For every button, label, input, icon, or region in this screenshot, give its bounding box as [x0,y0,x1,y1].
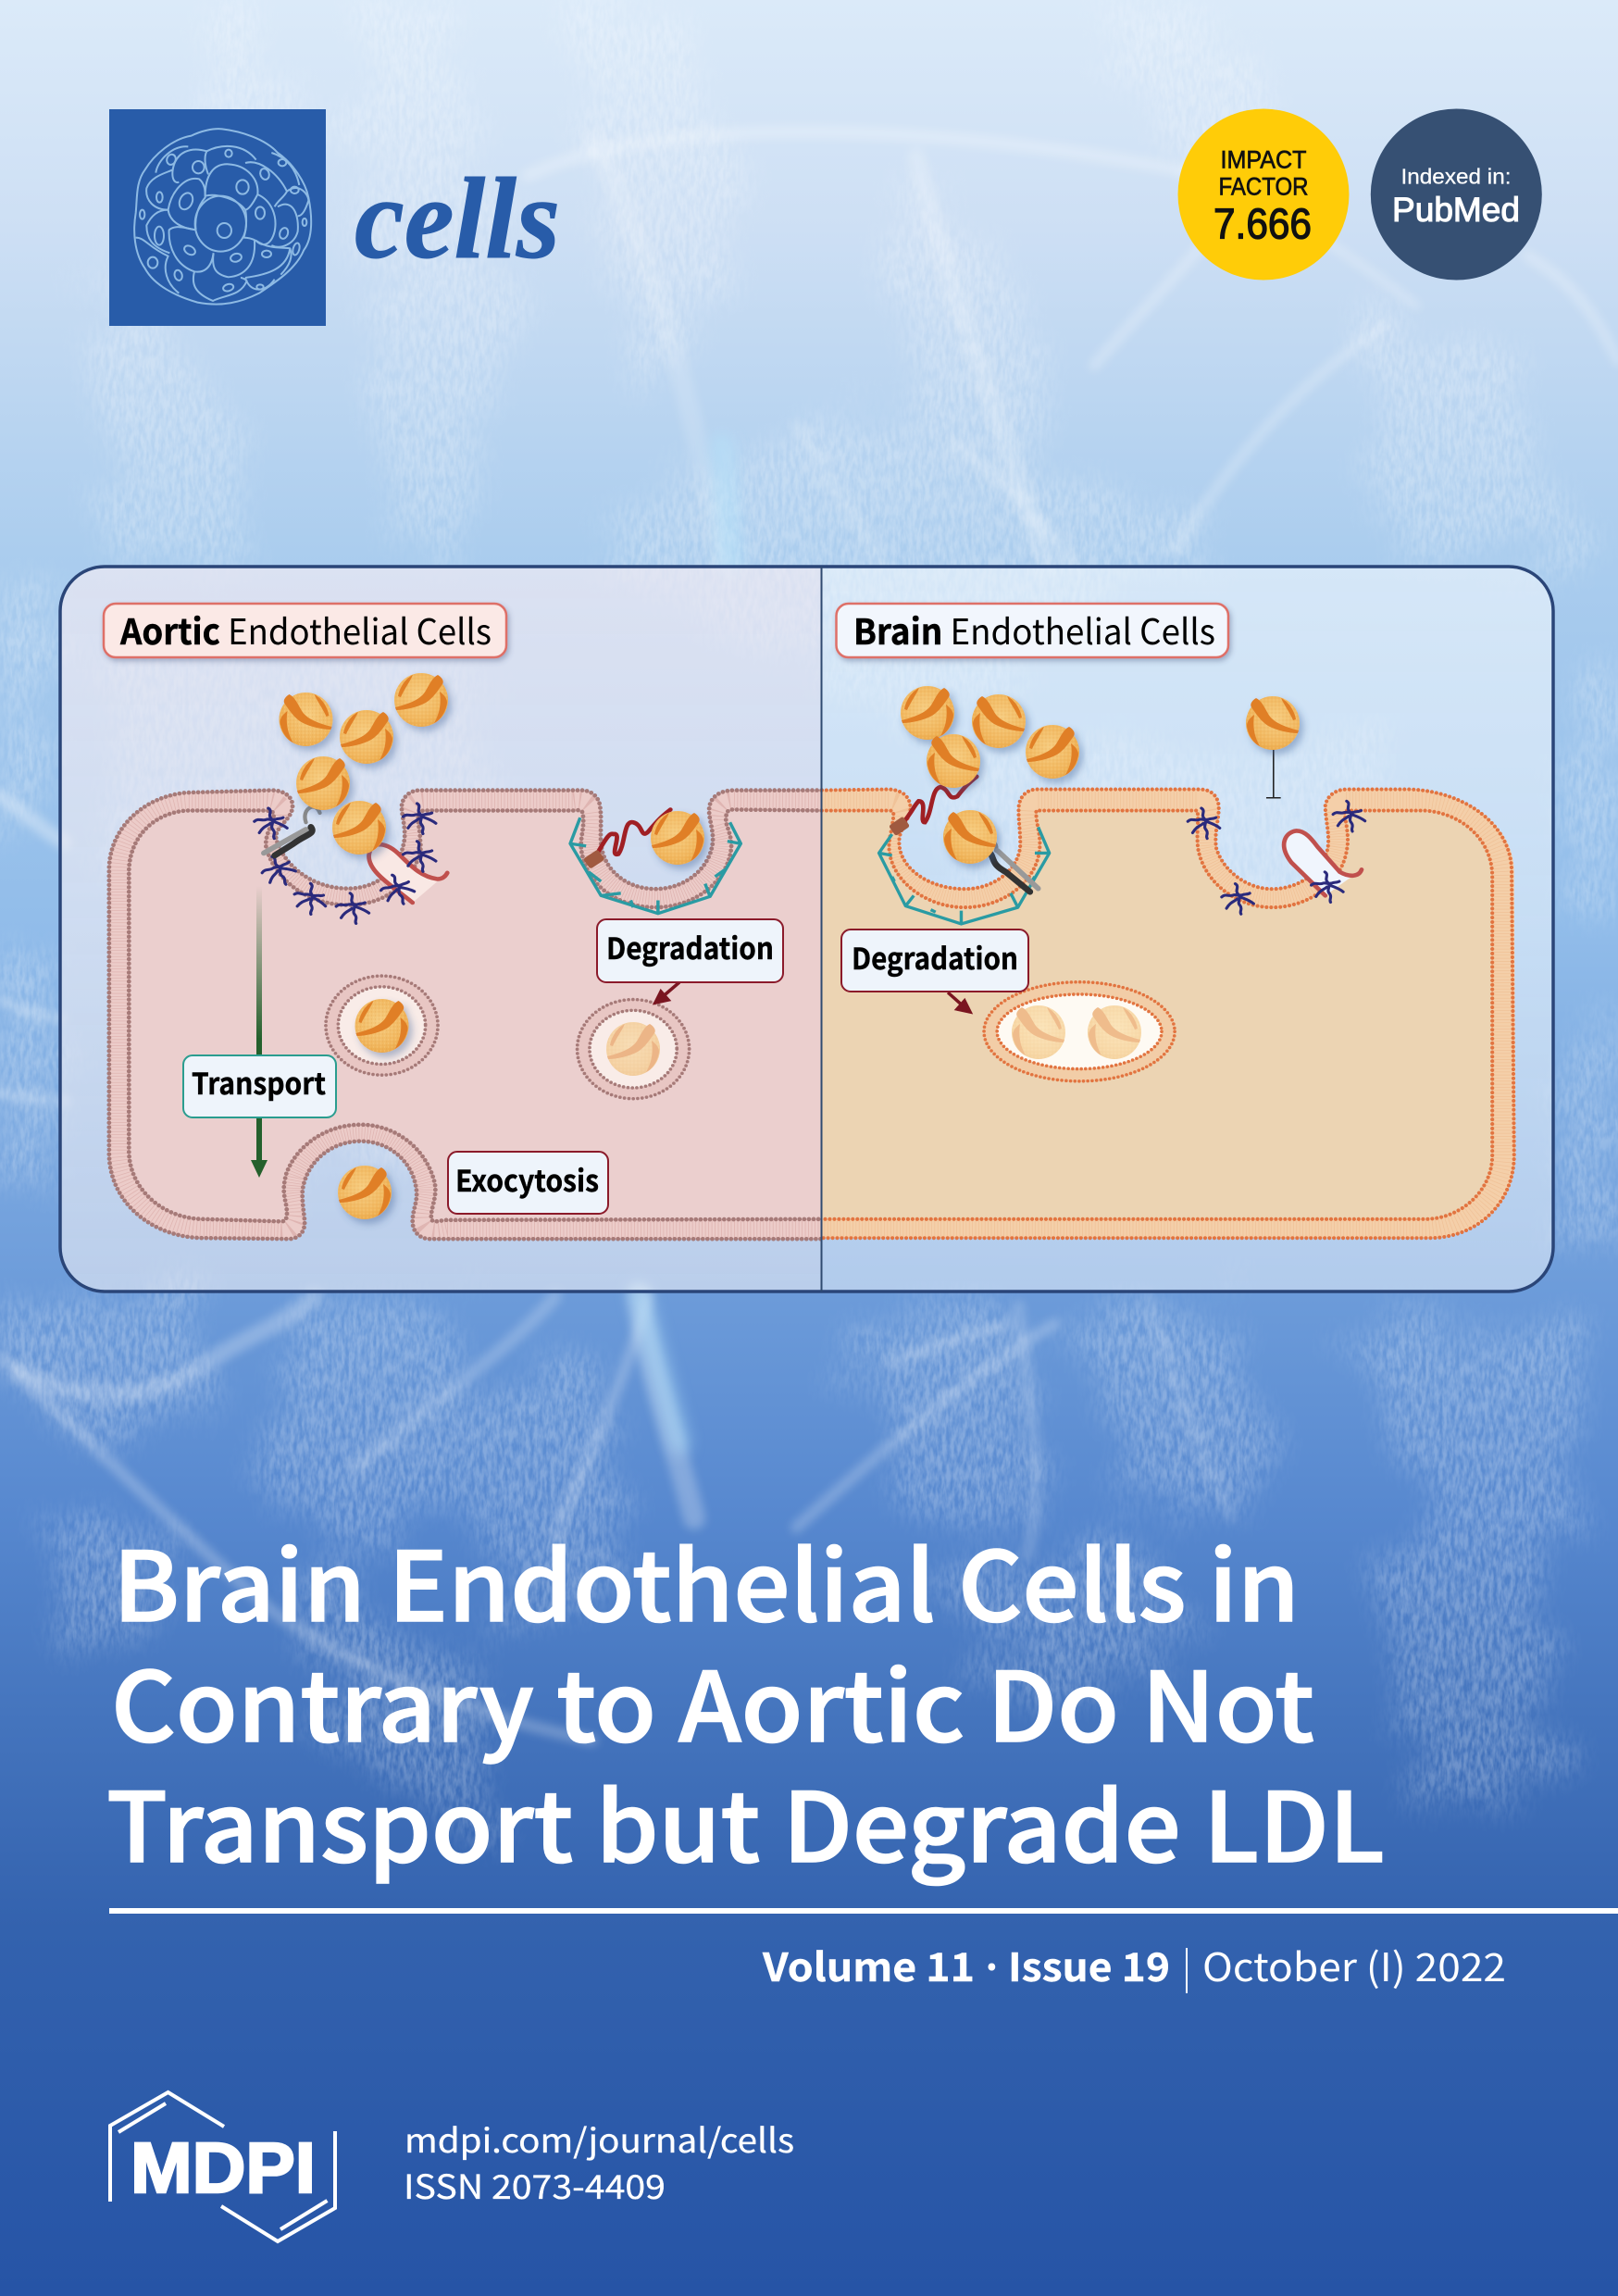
title: Transport but Degrade LDL [106,1750,1385,1890]
degraded ldl particles [606,1005,1141,1076]
journal url and issn: ISSN 2073-4409 [404,2161,666,2209]
label: aortic endothelial cells: Aortic Endothelial Cells [119,604,492,655]
badge: pubmed [1371,109,1542,280]
badge: impact factor [1177,109,1350,280]
journal logo [109,109,560,326]
issue info: Issue 19 [1008,1937,1170,1993]
label: degradation aortic: Degradation [606,926,774,968]
badge: impact factor: FACTOR [1218,173,1309,201]
badge: impact factor: 7.666 [1214,200,1312,248]
badge: pubmed: Indexed in: [1401,165,1511,189]
clathrin coat [570,817,741,914]
issue info: Volume 11 [762,1937,975,1993]
label: degradation brain: Degradation [852,936,1018,979]
title [106,1509,1385,1890]
label: exocytosis [448,1152,608,1214]
journal name: cells [355,156,560,283]
issue info: · [980,1937,1003,1993]
cell cluster icon [134,129,311,305]
clathrin coat [879,827,1050,924]
issue info: October (I) 2022 [1202,1937,1506,1993]
label: brain endothelial cells: Brain Endothelial Cells [853,604,1215,655]
ldl particles [280,673,1300,1219]
journal url and issn: mdpi.com/journal/cells [404,2115,794,2163]
panel backdrop [60,567,1553,1292]
grey scavenger receptor [981,841,1039,892]
red caveolar loop [1284,830,1362,895]
publisher logo: mdpi [110,2092,335,2241]
journal url and issn [404,2115,794,2209]
label: exocytosis: Exocytosis [455,1158,599,1201]
red coiled receptor [583,809,670,869]
inhibition t-bar [1266,749,1281,798]
badge: pubmed: PubMed [1392,191,1520,229]
aortic cell body [109,791,822,1239]
label: transport: Transport [192,1061,326,1104]
red coiled receptor [889,777,977,836]
degradation arrow aortic [655,982,679,1003]
divider line [820,567,822,1292]
issue info [762,1937,1506,1993]
transport arrow [251,886,268,1178]
brain lysosome [984,982,1175,1081]
title: Brain Endothelial Cells in [113,1509,1300,1649]
grey scavenger receptor [264,807,320,855]
panel: comparison figure [60,567,1553,1292]
title rule [109,1908,1618,1914]
navy receptors [1188,801,1365,914]
publisher logo: mdpi: MDPI [131,2128,316,2208]
aortic endosome [326,976,438,1075]
red caveolar loop [369,844,447,903]
aortic lysosome [578,1000,690,1099]
label: degradation brain [841,930,1028,992]
label: transport [183,1055,336,1117]
badge: impact factor: IMPACT [1220,146,1307,174]
title: Contrary to Aortic Do Not [111,1629,1314,1769]
brain cell body [822,749,1515,1238]
navy receptors [255,804,436,923]
degradation arrow brain [948,992,970,1012]
label: degradation aortic [597,919,783,982]
